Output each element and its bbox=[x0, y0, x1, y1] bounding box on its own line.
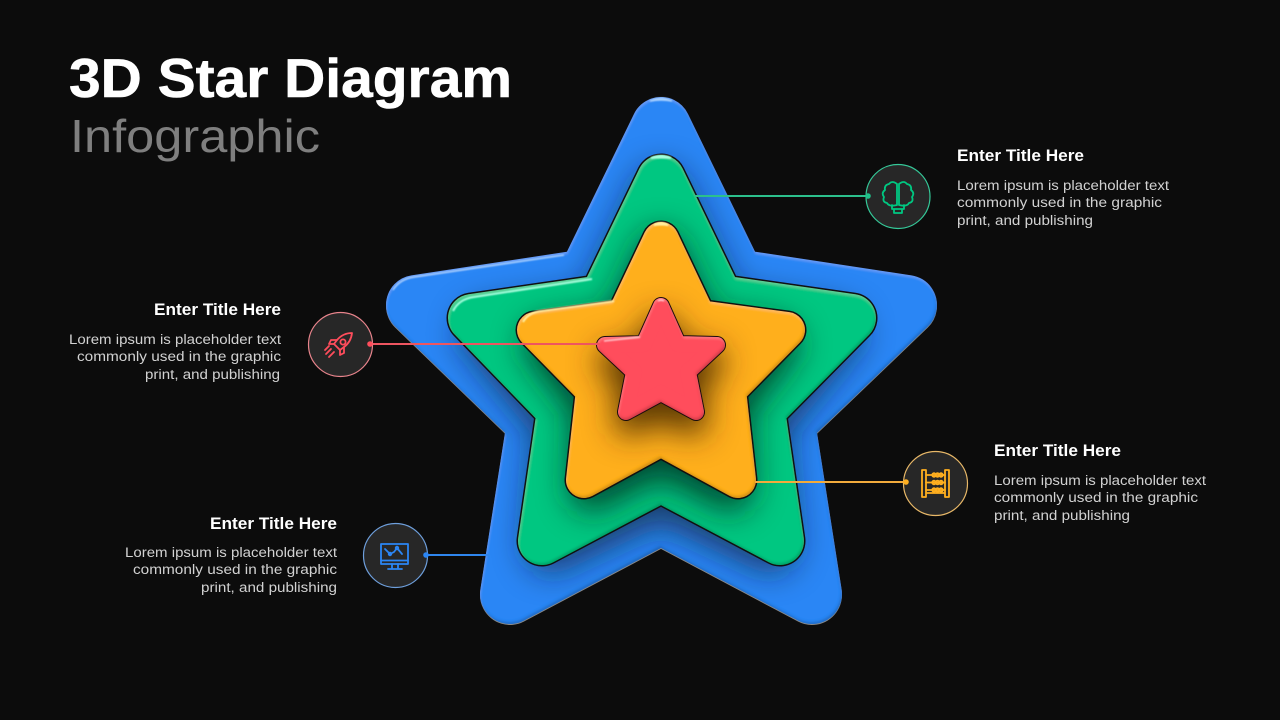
icon circle: orange abacus bbox=[903, 452, 968, 516]
text block: left: Lorem ipsum is placeholder text bbox=[69, 332, 281, 347]
text block: left bbox=[69, 301, 281, 382]
text block: bottom left bbox=[125, 515, 337, 595]
star layer: blue bbox=[393, 98, 907, 595]
icon circle: red rocket bbox=[308, 312, 373, 376]
text block: right: print, and publishing bbox=[994, 508, 1130, 523]
connector line: red bbox=[371, 343, 600, 345]
star layer: red bbox=[604, 300, 717, 412]
text block: bottom left: Enter Title Here bbox=[210, 515, 337, 533]
text block: top right: print, and publishing bbox=[957, 213, 1093, 228]
callout: left red bbox=[69, 301, 600, 382]
text block: top right: commonly used in the graphic bbox=[957, 195, 1162, 210]
callout: right orange bbox=[755, 442, 1206, 523]
star layer: green bbox=[453, 156, 852, 541]
text block: left: print, and publishing bbox=[145, 367, 280, 382]
icon circle: blue monitor bbox=[364, 524, 429, 588]
icon circle: green brain bbox=[865, 164, 930, 228]
text block: right: Enter Title Here bbox=[994, 442, 1121, 460]
title: 3D Star Diagram bbox=[69, 47, 512, 109]
connector line: green bbox=[695, 195, 868, 197]
connector line: orange bbox=[755, 481, 905, 483]
text block: left: Enter Title Here bbox=[154, 301, 281, 319]
text block: bottom left: Lorem ipsum is placeholder text bbox=[125, 545, 337, 560]
subtitle: Infographic bbox=[70, 110, 320, 162]
text block: top right: Lorem ipsum is placeholder text bbox=[957, 178, 1169, 193]
callout: bottom left blue bbox=[125, 515, 490, 595]
text block: top right: Enter Title Here bbox=[957, 147, 1084, 165]
star layer: orange bbox=[523, 223, 787, 480]
text block: bottom left: commonly used in the graphic bbox=[133, 562, 337, 577]
text block: bottom left: print, and publishing bbox=[201, 580, 337, 595]
callout: top right green bbox=[695, 147, 1169, 228]
text block: left: commonly used in the graphic bbox=[77, 349, 281, 364]
star diagram bbox=[393, 98, 907, 595]
text block: right: commonly used in the graphic bbox=[994, 490, 1198, 505]
text block: top right bbox=[957, 147, 1169, 228]
text block: right bbox=[994, 442, 1206, 523]
text block: right: Lorem ipsum is placeholder text bbox=[994, 473, 1206, 488]
connector line: blue bbox=[426, 554, 490, 556]
